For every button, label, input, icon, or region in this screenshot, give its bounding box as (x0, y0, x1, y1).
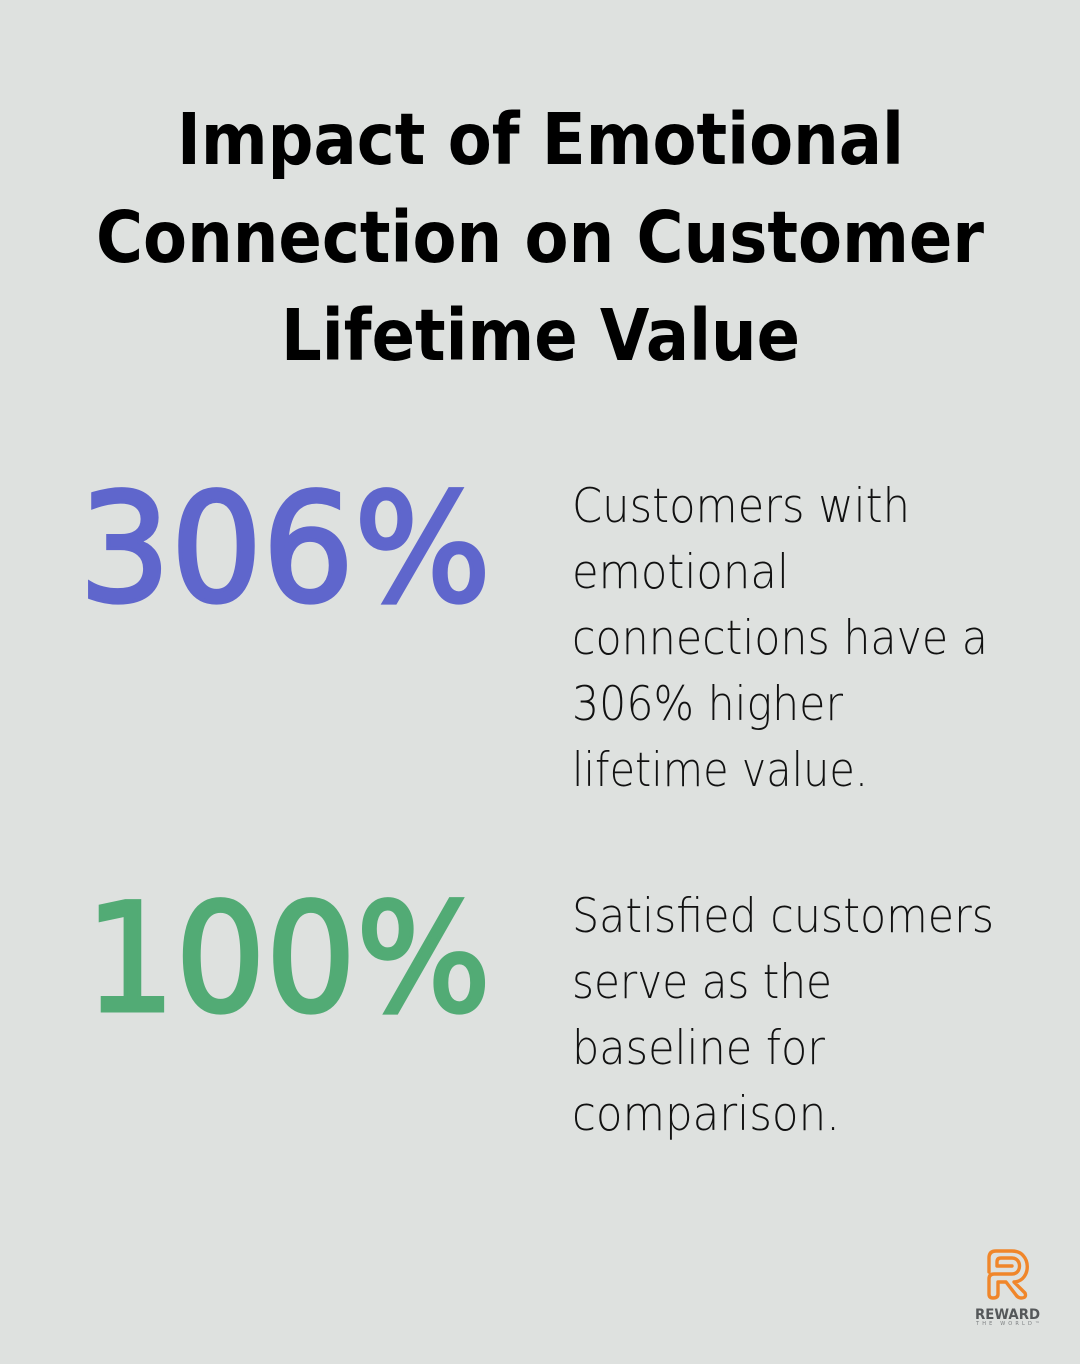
wordmark: REWARD (975, 1307, 1040, 1323)
title: Impact of Emotional (177, 98, 904, 181)
icon: orange R (989, 1251, 1027, 1298)
description: 306%: Customers with (572, 479, 910, 534)
description: 100% (572, 889, 994, 1142)
title: Lifetime Value (281, 294, 800, 377)
title: Connection on Customer (96, 196, 984, 279)
description: 100%: Satisfied customers (572, 889, 994, 944)
description: 306%: lifetime value. (572, 743, 868, 798)
description: 306%: emotional (572, 545, 789, 600)
description: 100%: comparison. (572, 1087, 840, 1142)
description: 100%: serve as the (572, 955, 832, 1010)
title (96, 98, 984, 377)
description: 306%: 306% higher (572, 677, 843, 732)
tagline: THE WORLD™ (975, 1321, 1040, 1327)
description: 306%: connections have a (572, 611, 988, 666)
stat: 306%: 306% (79, 462, 491, 636)
description: 306% (572, 479, 988, 798)
description: 100%: baseline for (572, 1021, 825, 1076)
stat: 100%: 100% (85, 872, 491, 1046)
logo: Reward the World (975, 1251, 1040, 1327)
